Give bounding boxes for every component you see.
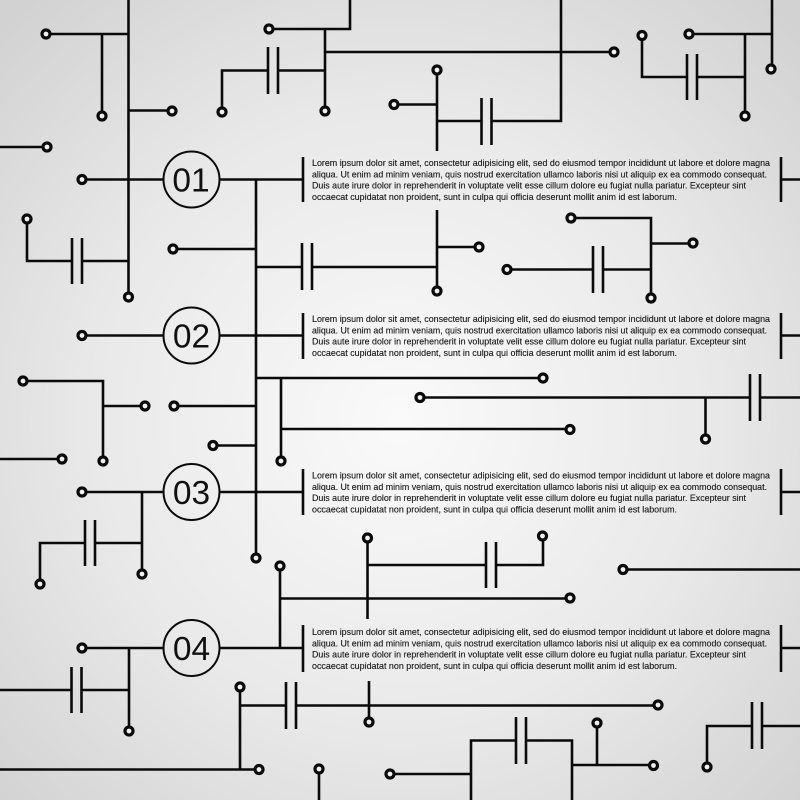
circuit: bottom left (0, 681, 662, 800)
badge: 04: 04 (173, 631, 210, 668)
step 04 (0, 620, 800, 735)
step 02 (78, 308, 800, 364)
circuit: top right (638, 0, 775, 120)
wire: step 03 connector (220, 469, 303, 515)
wire: step 01 connector (128, 157, 303, 202)
text block: step 01: Duis aute irure dolor in reprehenderit in voluptate velit esse cillum dolore eu fugiat nulla pariatur. Excepteur sint (312, 180, 746, 191)
main vertical bus (169, 180, 483, 562)
right connector: step 02 (781, 313, 800, 359)
text block: step 03: Duis aute irure dolor in reprehenderit in voluptate velit esse cillum dolore eu fugiat nulla pariatur. Excepteur sint (312, 492, 746, 503)
badge: 02 (164, 308, 220, 364)
text block: step 04: Lorem ipsum dolor sit amet, consectetur adipisicing elit, sed do eiusmod tempor incididunt ut labore et dolore magna (312, 626, 771, 637)
text block: step 02: aliqua. Ut enim ad minim veniam, quis nostrud exercitation ullamco laboris nisi ut aliquip ex ea commodo consequat. (312, 324, 767, 335)
text block: step 03: aliqua. Ut enim ad minim veniam, quis nostrud exercitation ullamco laboris nisi ut aliquip ex ea commodo consequat. (312, 481, 767, 492)
text block: step 02: Lorem ipsum dolor sit amet, consectetur adipisicing elit, sed do eiusmod tempor incididunt ut labore et dolore magna (312, 313, 771, 324)
right connector: step 03 (781, 469, 800, 515)
circuit: top centre (218, 0, 618, 151)
text block: step 01: occaecat cupidatat non proident, sunt in culpa qui officia deserunt mollit anim id est laborum. (312, 191, 677, 202)
node: step 01 input (78, 176, 86, 184)
badge: 04 (164, 620, 220, 676)
text block: step 01: Lorem ipsum dolor sit amet, consectetur adipisicing elit, sed do eiusmod tempor incididunt ut labore et dolore magna (312, 157, 771, 168)
text block: step 01 (312, 157, 771, 202)
badge: 03: 03 (173, 475, 210, 512)
text block: step 02 (312, 313, 771, 358)
text block: step 04: Duis aute irure dolor in reprehenderit in voluptate velit esse cillum dolore eu fugiat nulla pariatur. Excepteur sint (312, 649, 746, 660)
text block: step 03 (312, 470, 771, 514)
text block: step 04: aliqua. Ut enim ad minim veniam, quis nostrud exercitation ullamco laboris nisi ut aliquip ex ea commodo consequat. (312, 637, 767, 648)
circuit: below step 03 (276, 532, 800, 648)
badge: 01: 01 (172, 162, 210, 200)
badge: 03 (164, 464, 220, 520)
wire: step 02 connector (86, 313, 303, 359)
circuit: middle left (0, 377, 149, 465)
step 03 (36, 464, 800, 588)
circuit: top left bus (0, 0, 176, 301)
right connector: step 04 (781, 625, 800, 672)
wire: step 04 connector (220, 625, 303, 672)
step 01 (78, 152, 800, 208)
right connector: step 01 (781, 157, 800, 202)
text block: step 04 (312, 626, 771, 671)
text block: step 02: Duis aute irure dolor in reprehenderit in voluptate velit esse cillum dolore eu fugiat nulla pariatur. Excepteur sint (312, 336, 746, 347)
text block: step 03: occaecat cupidatat non proident, sunt in culpa qui officia deserunt mollit anim id est laborum. (312, 504, 677, 514)
circuit: capacitor branch right of section 1 (503, 214, 697, 302)
text block: step 01: aliqua. Ut enim ad minim veniam, quis nostrud exercitation ullamco laboris nisi ut aliquip ex ea commodo consequat. (312, 168, 767, 179)
text block: step 02: occaecat cupidatat non proident, sunt in culpa qui officia deserunt mollit anim id est laborum. (312, 347, 677, 358)
text block: step 04: occaecat cupidatat non proident, sunt in culpa qui officia deserunt mollit anim id est laborum. (312, 660, 677, 671)
circuit: middle branches (170, 374, 800, 465)
circuit: step 04 input with capacitor (0, 644, 162, 735)
badge: 01 (164, 152, 220, 208)
node: step 02 input (78, 332, 86, 340)
circuit: bottom centre (386, 717, 658, 800)
text block: step 03: Lorem ipsum dolor sit amet, consectetur adipisicing elit, sed do eiusmod tempor incididunt ut labore et dolore magna (312, 470, 771, 480)
badge: 02: 02 (173, 318, 210, 356)
circuit: step 03 input with capacitor (36, 488, 162, 588)
circuit: bottom right (703, 702, 800, 771)
